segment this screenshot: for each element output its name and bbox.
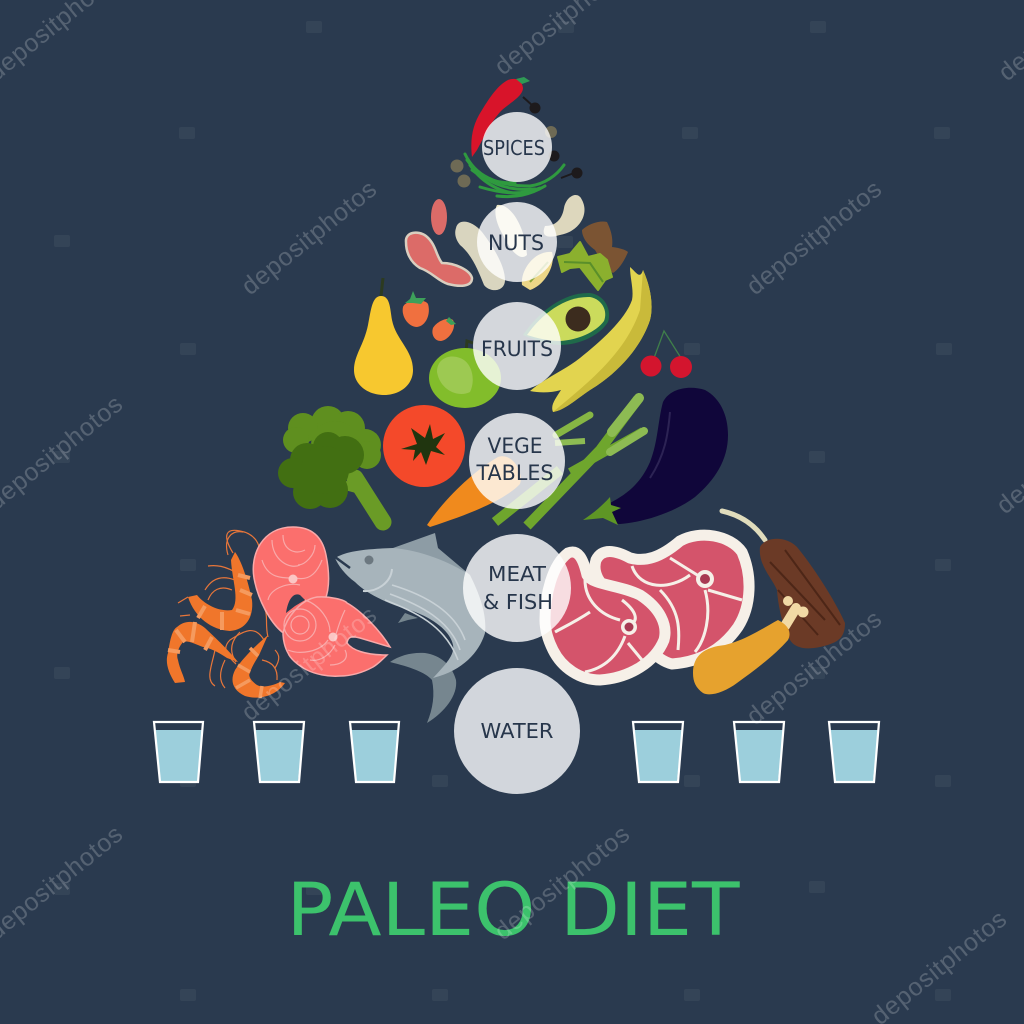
- circle: vegetables: VEGE: [488, 434, 542, 458]
- circle: fruits: FRUITS: [481, 337, 553, 361]
- circle: water: WATER: [480, 719, 554, 743]
- circle: spices: SPICES: [483, 136, 545, 160]
- icon: glass 4: [633, 722, 683, 782]
- watermarks: depositphotos: [236, 601, 382, 727]
- circle: vegetables: [469, 413, 565, 509]
- watermarks: depositphotos: [489, 820, 635, 946]
- icon: fruits group: [354, 267, 692, 412]
- watermarks: depositphotos: [741, 175, 887, 301]
- icon: spices group: [450, 77, 582, 197]
- icon: apple: [429, 341, 501, 408]
- icon: banana: [530, 267, 652, 412]
- circle: meat and fish: & FISH: [483, 590, 553, 614]
- icon: tuna fish: [335, 533, 485, 723]
- icon: cherries: [640, 331, 692, 378]
- circle: spices: [482, 112, 552, 182]
- icon: shrimps: [167, 530, 285, 698]
- icon: eggplant: [583, 388, 728, 525]
- icon: glass 2: [254, 722, 304, 782]
- circle: nuts: [477, 202, 557, 282]
- icon: back steak: [595, 535, 749, 664]
- icon: broccoli: [278, 406, 383, 522]
- icon: salmon steak back: [253, 527, 329, 640]
- circle: nuts: NUTS: [488, 231, 544, 255]
- icon: water glasses: [154, 722, 879, 782]
- title: PALEO DIET: [286, 868, 740, 953]
- watermarks: depositphotos: [741, 605, 887, 731]
- circle: fruits: [473, 302, 561, 390]
- icon: salmon steak front: [283, 597, 390, 676]
- icon: glass 1: [154, 722, 203, 782]
- watermarks: depositphotos: [236, 175, 382, 301]
- icon: vegetables group: [278, 388, 728, 527]
- circle: vegetables: TABLES: [476, 461, 554, 485]
- icon: glass 3: [350, 722, 399, 782]
- circle: meat and fish: MEAT: [488, 562, 547, 586]
- icon: tomato: [383, 405, 465, 487]
- circle: water: [454, 668, 580, 794]
- icon: meat group: [545, 511, 845, 694]
- icon: seafood group: [167, 527, 485, 723]
- icon: grilled meat: [722, 511, 845, 648]
- icon: front steak: [545, 552, 665, 680]
- icon: chicken drumstick: [693, 596, 808, 694]
- icon: glass 5: [734, 722, 784, 782]
- icon: asparagus: [495, 398, 644, 526]
- icon: nuts group: [406, 195, 628, 290]
- icon: glass 6: [829, 722, 879, 782]
- circle: meat and fish: [463, 534, 571, 642]
- icon: carrot: [427, 456, 521, 527]
- icon: avocado: [523, 293, 609, 345]
- icon: pear: [354, 278, 413, 395]
- icon: strawberries: [403, 291, 456, 341]
